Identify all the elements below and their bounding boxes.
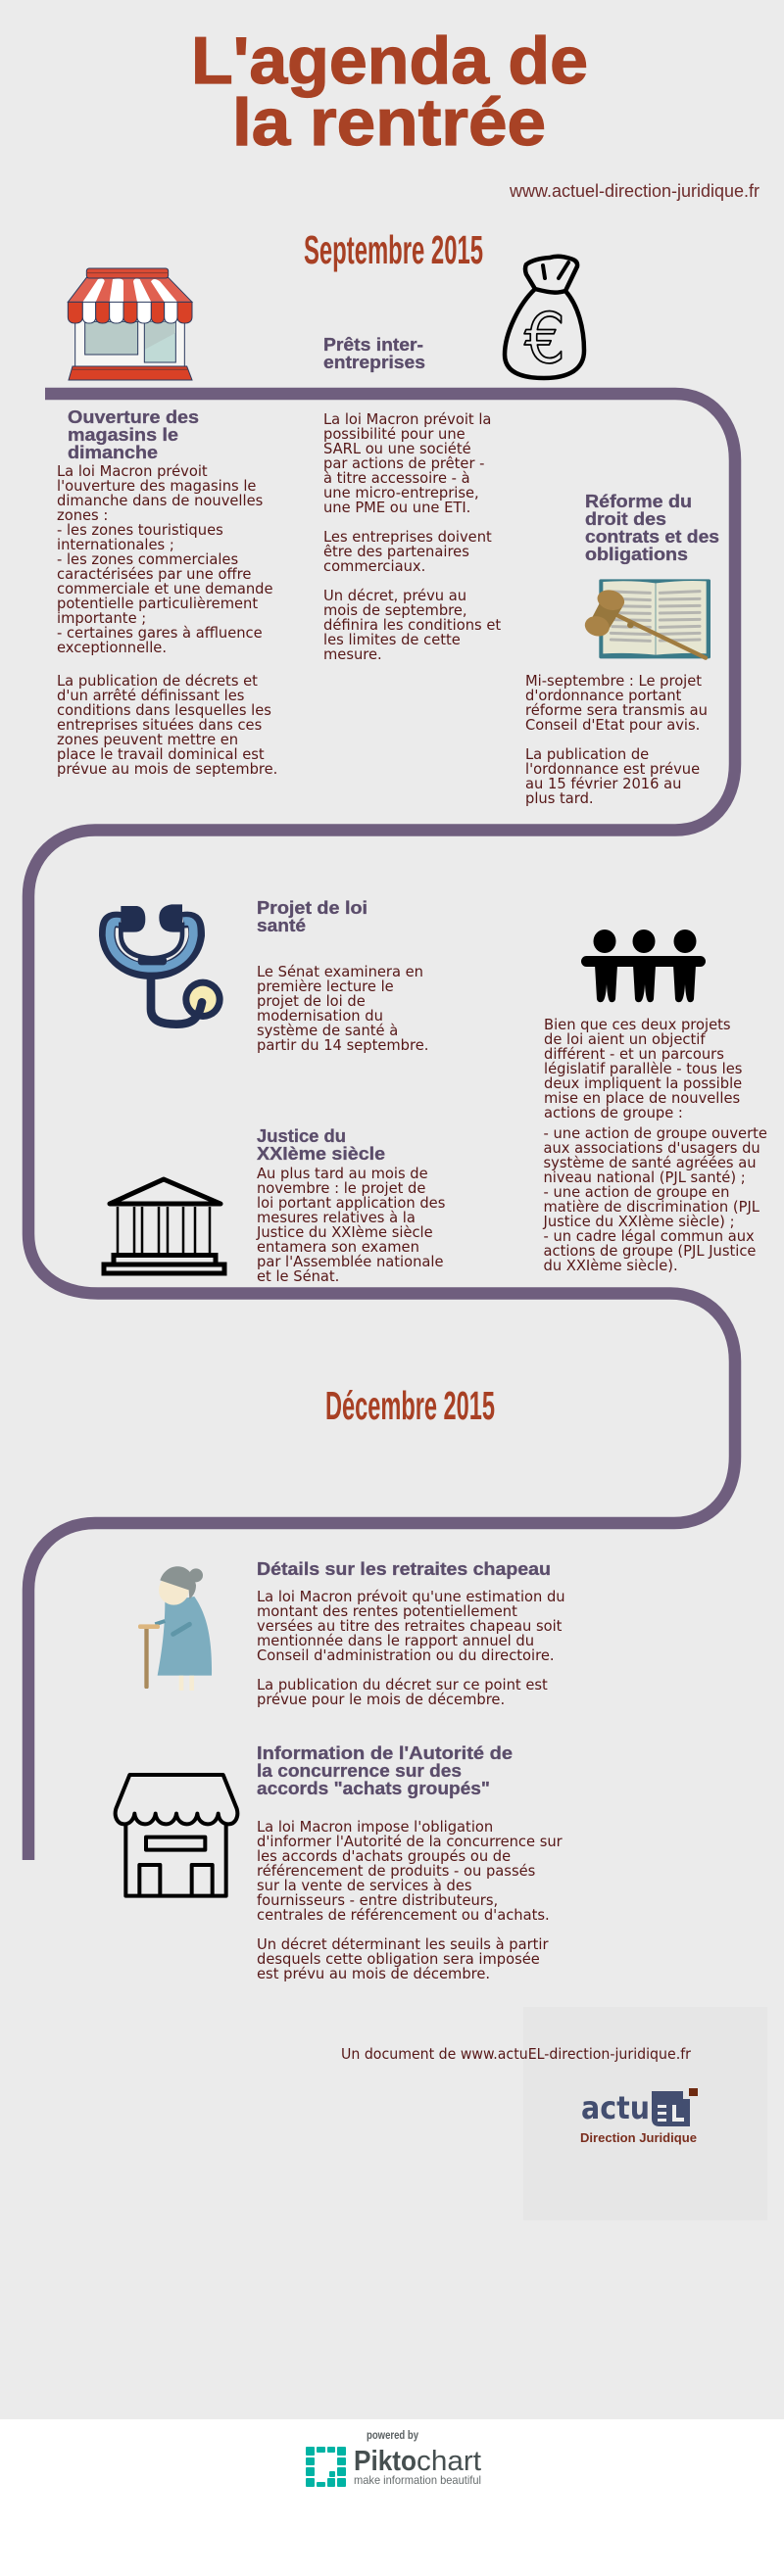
text: actions de groupe list: du XXIème siècle). [543,1258,678,1274]
icon: storefront [68,268,192,380]
text: ouverture des magasins: - certaines gares à affluence [57,625,263,642]
text: justice du XXIème siècle: Justice du XXIème siècle [256,1224,433,1241]
text: ouverture des magasins: internationales ; [57,537,174,553]
text: ouverture des magasins: d'un arrêté définissant les [57,688,244,704]
text: réforme du droit des contrats: au 15 février 2016 au [525,776,681,792]
logo: actuEL [580,2088,698,2145]
website url: www.actuel-direction-juridique.fr [509,181,760,201]
text: ouverture des magasins: entreprises situées dans ces [57,717,262,734]
text: prêts inter-entreprises: mesure. [323,646,382,663]
text: ouverture des magasins: La publication de décrets et [57,673,258,690]
text: ouverture des magasins: - les zones touristiques [57,522,223,539]
heading: réforme du droit des contrats: contrats et des [585,527,719,547]
text: prêts inter-entreprises: SARL ou une société [323,441,471,457]
heading: information autorité de la concurrence [257,1743,513,1798]
heading: ouverture des magasins: dimanche [68,443,158,462]
text: justice du XXIème siècle: mesures relatives à la [257,1210,416,1226]
heading: Prêts inter-entreprises: entreprises [323,353,425,372]
heading: Prêts inter-entreprises: Prêts inter- [323,335,423,355]
timeline path [28,394,735,1860]
text: prêts inter-entreprises: possibilité pour une [323,426,466,443]
text: actions de groupe list: niveau national (PJL santé) ; [543,1169,746,1186]
text: retraites chapeau: montant des rentes potentiellement [257,1603,517,1620]
text: réforme du droit des contrats: Conseil d'Etat pour avis. [525,717,700,734]
text: projet de loi santé: Le Sénat examinera en [257,964,423,980]
text: ouverture des magasins: importante ; [57,610,146,627]
icon: three people [581,930,706,1002]
text: réforme du droit des contrats: l'ordonnance est prévue [525,761,700,778]
panel: ouverture des magasins [57,407,277,778]
text: justice du XXIème siècle: par l'Assemblée nationale [257,1254,444,1270]
text: actions de groupe list: actions de groupe (PJL Justice [543,1243,756,1260]
heading: réforme du droit des contrats [585,492,719,564]
text: information autorité de la concurrence: d'informer l'Autorité de la concurrence sur [257,1834,564,1850]
text: actions de groupe intro: actions de groupe : [544,1105,683,1121]
text: prêts inter-entreprises: être des partenaires [323,544,469,560]
text: justice du XXIème siècle: et le Sénat. [257,1268,339,1285]
heading: justice du XXIème siècle [257,1126,385,1164]
text: projet de loi santé: modernisation du [257,1008,383,1025]
text: information autorité de la concurrence: Un décret déterminant les seuils à partir [257,1936,549,1953]
heading: justice du XXIème siècle: XXIème siècle [257,1144,385,1164]
heading: projet de loi santé [257,898,368,935]
text: prêts inter-entreprises: une PME ou une ETI. [323,500,470,516]
icon: shop outline [116,1775,237,1896]
text: projet de loi santé: première lecture le [257,978,394,995]
text: prêts inter-entreprises: Les entreprises doivent [323,529,492,546]
logo: actuEL: Direction Juridique [580,2130,697,2145]
panel: projet de loi santé [257,898,428,1054]
footer: powered by Piktochart: make information beautiful [354,2473,481,2487]
icon: stethoscope [107,904,223,1025]
text: ouverture des magasins: caractérisées par une offre [57,566,251,583]
footer: powered by Piktochart: Pikto [354,2446,416,2477]
text: justice du XXIème siècle: entamera son examen [257,1239,419,1256]
text: actions de groupe intro: deux impliquent la possible [544,1075,742,1092]
heading: ouverture des magasins: Ouverture des [68,407,199,427]
heading: réforme du droit des contrats: Réforme du [585,492,692,511]
text: justice du XXIème siècle: loi portant application des [257,1195,445,1212]
heading: projet de loi santé: Projet de loi [257,898,368,918]
panel: retraites chapeau [257,1559,569,1708]
text: actions de groupe list: - une action de groupe en [543,1184,729,1201]
text: ouverture des magasins: La loi Macron prévoit [57,463,208,480]
text: retraites chapeau: La loi Macron prévoit qu'une estimation du [257,1589,565,1605]
heading: réforme du droit des contrats: droit des [585,509,666,529]
icon: book and gavel [583,579,710,658]
title: L'agenda de [191,24,588,98]
text: prêts inter-entreprises: Un décret, prévu au [323,588,466,604]
text: information autorité de la concurrence: fournisseurs - entre distributeurs, [257,1892,498,1909]
text: actions de groupe intro: de loi aient un objectif [544,1031,706,1048]
heading: ouverture des magasins: magasins le [68,425,178,445]
text: prêts inter-entreprises: mois de septembre, [323,602,467,619]
text: justice du XXIème siècle: novembre : le projet de [257,1180,425,1197]
text: ouverture des magasins: l'ouverture des magasins le [57,478,256,495]
text: projet de loi santé: système de santé à [257,1023,398,1039]
text: retraites chapeau: Conseil d'administration ou du directoire. [257,1647,555,1664]
text: actions de groupe list: - un cadre légal commun aux [543,1228,755,1245]
text: actions de groupe list: - une action de groupe ouverte [543,1125,767,1142]
text: projet de loi santé: partir du 14 septembre. [257,1037,428,1054]
text: prêts inter-entreprises: les limites de cette [323,632,461,648]
text: information autorité de la concurrence: centrales de référencement ou d'achats. [257,1907,550,1924]
text: ouverture des magasins: zones : [57,507,108,524]
text: réforme du droit des contrats: La publication de [525,746,649,763]
text: prêts inter-entreprises: une micro-entreprise, [323,485,479,501]
heading: réforme du droit des contrats: obligations [585,545,688,564]
text: ouverture des magasins: conditions dans lesquelles les [57,702,271,719]
text: information autorité de la concurrence: sur la vente de services à des [257,1878,472,1894]
text: ouverture des magasins: exceptionnelle. [57,640,167,656]
text: retraites chapeau: versées au titre des retraites chapeau soit [257,1618,563,1635]
text: ouverture des magasins: zones peuvent mettre en [57,732,238,748]
text: ouverture des magasins: commerciale et une demande [57,581,272,597]
text: actions de groupe intro: Bien que ces deux projets [544,1017,731,1033]
text: réforme du droit des contrats: Mi-septembre : Le projet [525,673,702,690]
text: ouverture des magasins: place le travail dominical est [57,746,265,763]
heading: justice du XXIème siècle: Justice du [257,1126,346,1146]
text: justice du XXIème siècle: Au plus tard au mois de [257,1166,428,1182]
text: actions de groupe list: Justice du XXIème siècle) ; [543,1214,735,1230]
text: projet de loi santé: projet de loi de [257,993,366,1010]
heading: projet de loi santé: santé [257,916,306,935]
title: la rentrée [232,85,546,160]
text: prêts inter-entreprises: La loi Macron prévoit la [323,411,491,428]
text: réforme du droit des contrats: réforme sera transmis au [525,702,708,719]
text: actions de groupe list: matière de discrimination (PJL [543,1199,760,1216]
heading: ouverture des magasins [68,407,199,462]
text: information autorité de la concurrence: est prévu au mois de décembre. [257,1966,490,1982]
text: ouverture des magasins: dimanche dans de nouvelles [57,493,263,509]
footer: powered by Piktochart: chart [416,2446,481,2477]
text: retraites chapeau: prévue pour le mois de décembre. [257,1692,505,1708]
text: réforme du droit des contrats: plus tard. [525,790,594,807]
icon: courthouse [104,1179,224,1273]
heading: information autorité de la concurrence: Information de l'Autorité de [257,1743,513,1763]
icon: money bag with euro: € [524,299,565,379]
title [191,24,588,160]
heading: information autorité de la concurrence: la concurrence sur des [257,1761,462,1781]
logo panel background [523,2007,767,2220]
panel: réforme du droit des contrats [525,492,719,807]
text: actions de groupe intro: législatif parallèle - tous les [544,1061,742,1077]
text: prêts inter-entreprises: par actions de prêter - [323,455,484,472]
logo: actuEL: actu [581,2089,650,2126]
text: information autorité de la concurrence: référencement de produits - ou passés [257,1863,535,1880]
text: actions de groupe intro: mise en place de nouvelles [544,1090,740,1107]
text: actions de groupe list: système de santé agréées au [543,1155,757,1171]
heading: Prêts inter-entreprises [323,335,425,372]
text: information autorité de la concurrence: desquels cette obligation sera imposée [257,1951,540,1968]
panel: justice du XXIème siècle [256,1126,450,1285]
text: prêts inter-entreprises: à titre accessoire - à [323,470,470,487]
text: information autorité de la concurrence: les accords d'achats groupés ou de [257,1848,511,1865]
text: retraites chapeau: mentionnée dans le rapport annuel du [257,1633,534,1649]
heading: information autorité de la concurrence: accords "achats groupés" [257,1779,490,1798]
text: prêts inter-entreprises: commerciaux. [323,558,425,575]
text: prêts inter-entreprises: définira les conditions et [323,617,501,634]
text: ouverture des magasins: prévue au mois de septembre. [57,761,277,778]
icon: money bag with euro [505,257,584,379]
heading: retraites chapeau: Détails sur les retraites chapeau [257,1559,551,1579]
footer: powered by Piktochart: powered by [367,2428,418,2442]
text: retraites chapeau: La publication du décret sur ce point est [257,1677,548,1693]
text: réforme du droit des contrats: d'ordonnance portant [525,688,682,704]
text: actions de groupe list: aux associations d'usagers du [543,1140,760,1157]
text: document credit: Un document de www.actuEL-direction-juridique.fr [341,2046,692,2063]
panel: information autorité de la concurrence [257,1743,566,1982]
icon: old woman with cane [138,1566,212,1691]
footer: powered by Piktochart [306,2428,481,2487]
text: information autorité de la concurrence: La loi Macron impose l'obligation [257,1819,493,1836]
text: ouverture des magasins: potentielle particulièrement [57,596,258,612]
text: actions de groupe intro: différent - et un parcours [544,1046,724,1063]
heading: Septembre 2015: Septembre 2015 [304,227,483,272]
text: ouverture des magasins: - les zones commerciales [57,551,238,568]
heading: Décembre 2015: Décembre 2015 [325,1383,495,1428]
